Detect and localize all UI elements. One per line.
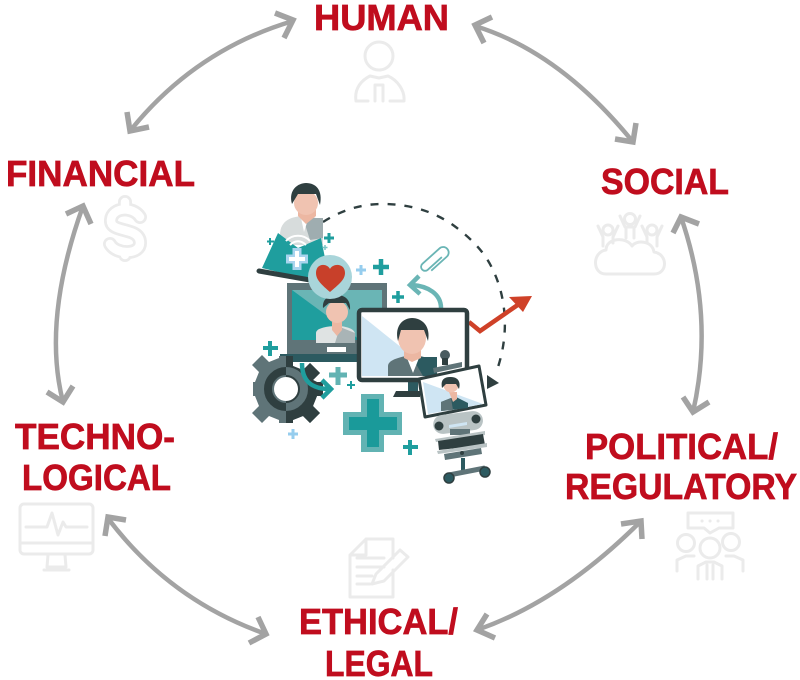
dashed arc [323, 204, 505, 367]
label: technological: LOGICAL [22, 457, 171, 498]
robot tablet screen [419, 366, 486, 417]
dashed arc arrowhead [487, 375, 499, 389]
icon: group with speech bubble [677, 513, 743, 579]
label: social: SOCIAL [601, 161, 729, 202]
paperclip [419, 245, 451, 275]
large medical cross [343, 394, 402, 452]
label: technological: TECHNO- [15, 416, 175, 457]
teal arrow from gear [302, 363, 331, 398]
icon: document and pen [350, 539, 408, 597]
central telehealth illustration [252, 183, 532, 483]
label: financial: FINANCIAL [6, 153, 195, 194]
label: political/regulatory [565, 426, 797, 507]
label: ethical/legal [299, 601, 458, 680]
laptop with doctor [280, 283, 387, 362]
doctor with tablet [259, 183, 325, 280]
label: technological [15, 416, 175, 498]
arrow: social to political [673, 217, 709, 412]
icon: heartbeat monitor [20, 504, 93, 570]
arrow: financial to technological [47, 206, 91, 402]
desktop monitor with doctor [359, 310, 467, 397]
icon: dollar [110, 202, 140, 255]
arrow: human to social [475, 17, 636, 142]
icon: people on cloud [596, 214, 664, 274]
heart badge [308, 255, 352, 299]
plus signs [263, 233, 418, 455]
arrow: technological to ethical [105, 517, 266, 643]
arrow: human to financial [127, 13, 293, 131]
icon: person [356, 42, 404, 101]
telepresence robot [432, 410, 490, 483]
gear [252, 355, 323, 423]
camera [433, 350, 462, 373]
label: political/regulatory: POLITICAL/ [585, 426, 778, 467]
red trend arrow [469, 296, 532, 331]
label: ethical/legal: ETHICAL/ [299, 601, 458, 642]
curved arrow [410, 276, 441, 308]
arrow: ethical to political [477, 521, 642, 638]
